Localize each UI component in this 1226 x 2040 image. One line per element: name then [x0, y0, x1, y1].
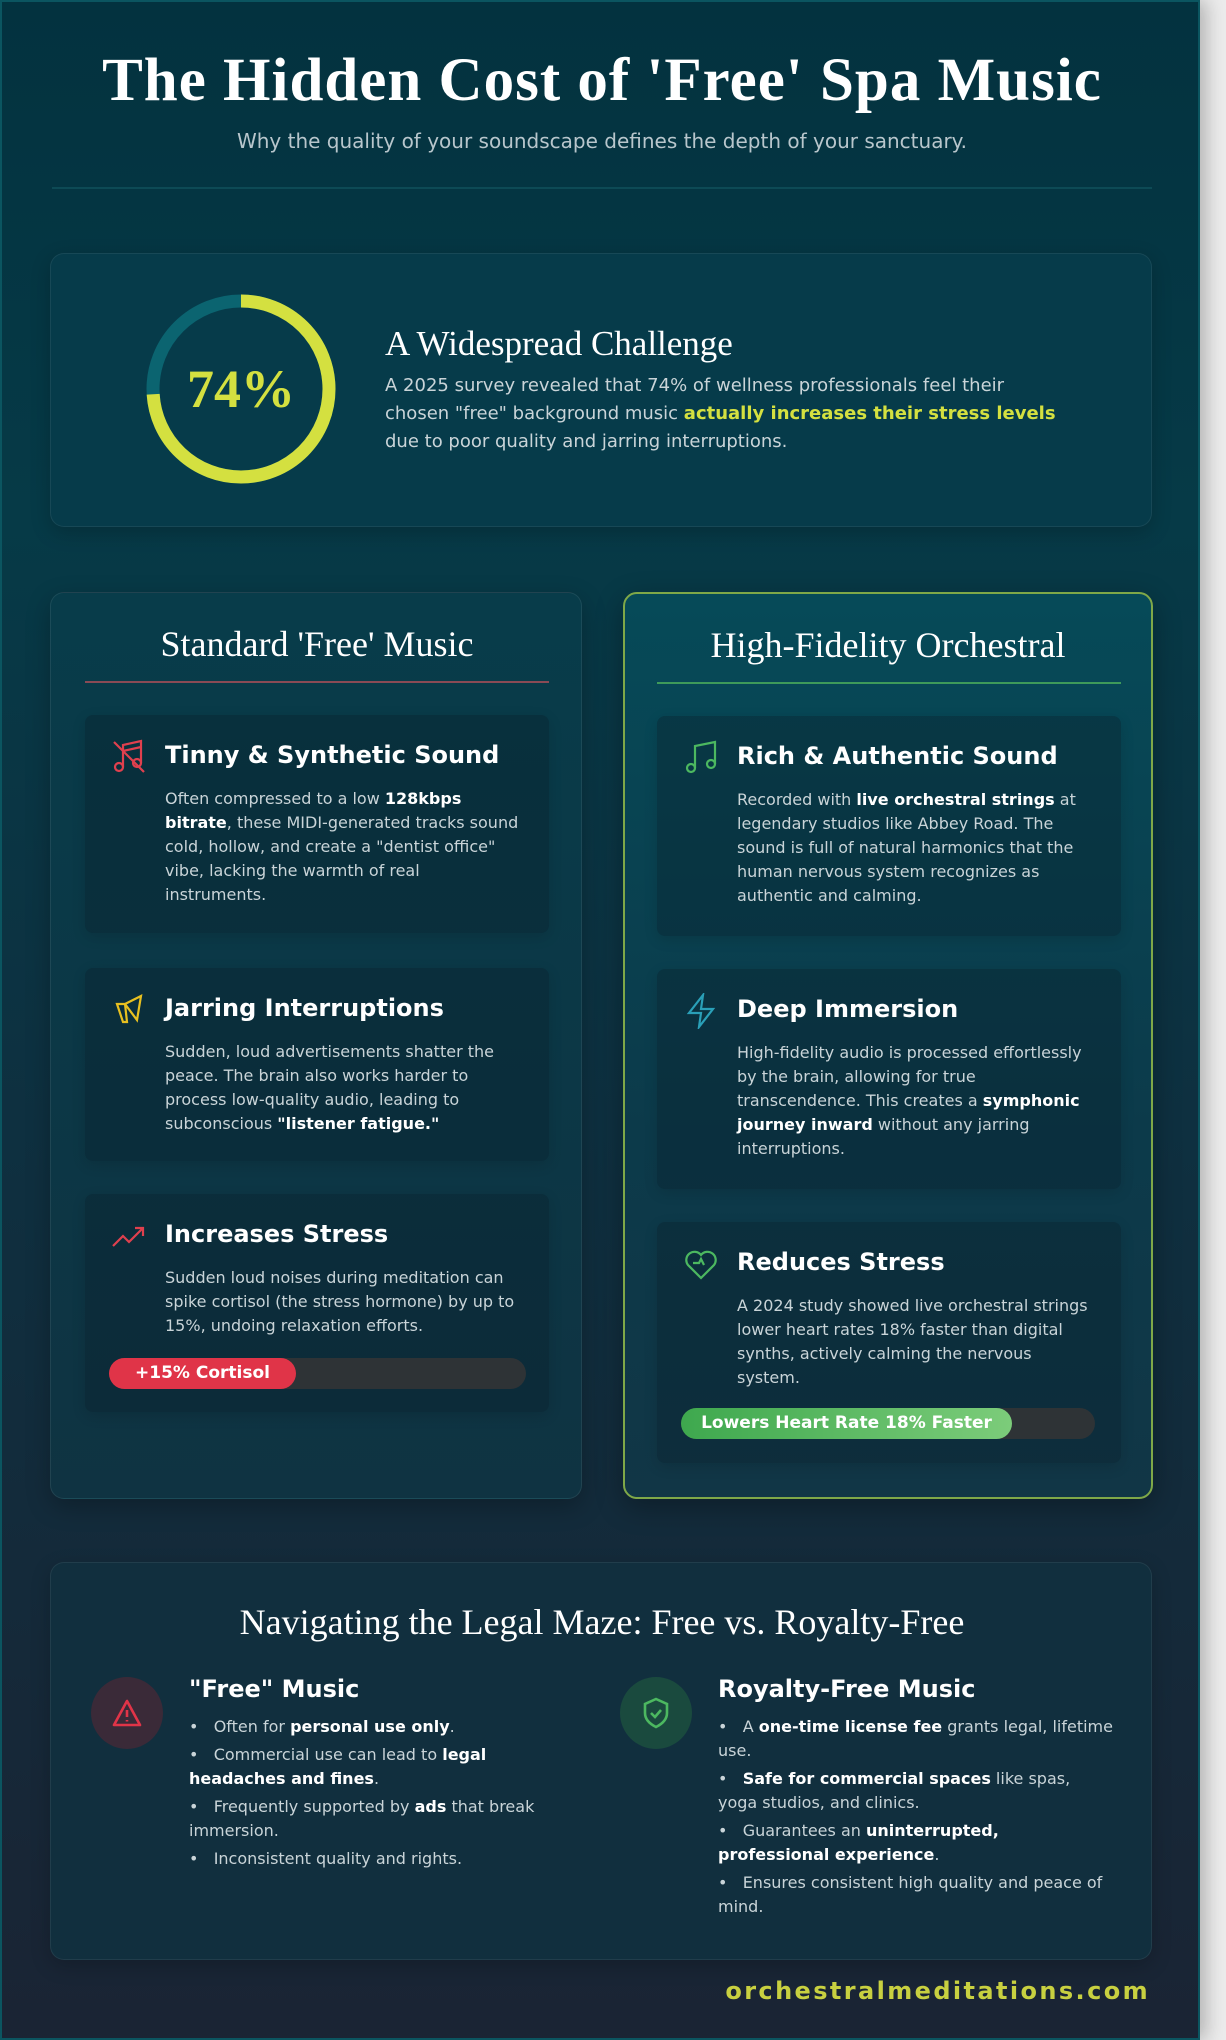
subtitle: Why the quality of your soundscape defines the depth of your sanctuary.	[237, 129, 967, 153]
column: royalty-free music: yoga studios, and clinics.	[718, 1793, 920, 1812]
icon: broken note	[113, 740, 145, 773]
heading: A Widespread Challenge	[385, 324, 733, 363]
column: free music: • Often for personal use only.	[189, 1717, 455, 1736]
bar: heart rate: Lowers Heart Rate 18% Faster	[701, 1413, 992, 1433]
card: increases stress	[85, 1194, 549, 1412]
title: The Hidden Cost of 'Free' Spa Music	[102, 47, 1102, 114]
column: royalty-free music: • Safe for commercial spaces like spas,	[718, 1769, 1070, 1788]
column: royalty-free music	[620, 1675, 1113, 1916]
icon: warning	[91, 1677, 163, 1749]
bar: heart rate	[681, 1408, 1095, 1439]
column: royalty-free music: • A one-time license fee grants legal, lifetime	[718, 1717, 1113, 1736]
icon: heart	[685, 1250, 717, 1280]
card: rich sound	[657, 716, 1121, 936]
column: royalty-free music: • Ensures consistent high quality and peace of	[718, 1873, 1102, 1892]
card: increases stress: Sudden loud noises during meditation can spike cortisol (the stress hormone) by up to 15%, undoing relaxation efforts.	[165, 1268, 514, 1335]
panel: widespread challenge	[50, 253, 1152, 527]
donut chart 74%	[146, 294, 336, 484]
icon: shield	[620, 1677, 692, 1749]
column: free music: • Commercial use can lead to legal headaches and fines.	[189, 1745, 486, 1788]
card: deep immersion: High-fidelity audio is processed effortlessly by the brain, allowing for true transcendence. This creates a symphonic journey inward without any jarring interruptions.	[737, 1043, 1082, 1158]
icon: music note	[686, 740, 716, 774]
card: tinny sound: vibe, lacking the warmth of real	[165, 861, 420, 880]
donut chart 74%: 74%	[187, 359, 295, 419]
icon: trend up	[112, 1226, 144, 1247]
card: tinny sound: Tinny & Synthetic Sound	[165, 741, 499, 769]
card: deep immersion: Deep Immersion	[737, 995, 958, 1023]
column: royalty-free music: use.	[718, 1741, 751, 1760]
column: free music	[91, 1675, 534, 1868]
column: royalty-free music: professional experience.	[718, 1845, 939, 1864]
column: free music: "Free" Music	[189, 1675, 359, 1703]
heading: High-Fidelity Orchestral	[711, 625, 1065, 665]
card: tinny sound	[85, 715, 549, 933]
column: royalty-free music: Royalty-Free Music	[718, 1675, 975, 1703]
card: tinny sound: bitrate, these MIDI-generated tracks sound cold, hollow, and create a "dentist office"	[165, 813, 518, 856]
heading: Navigating the Legal Maze: Free vs. Royalty-Free	[240, 1602, 964, 1642]
bar: cortisol: +15% Cortisol	[135, 1363, 270, 1383]
card: rich sound: Recorded with live orchestral strings at legendary studios like Abbey Road. The sound is full of natural harmonics that the human nervous system recognizes as authentic and calming.	[737, 790, 1076, 905]
card: reduces stress: Reduces Stress	[737, 1248, 945, 1276]
card: tinny sound: instruments.	[165, 885, 266, 904]
column: free music: • Frequently supported by ads that break immersion.	[189, 1797, 534, 1840]
panel: legal maze	[50, 1562, 1152, 1960]
column: royalty-free music: • Guarantees an uninterrupted,	[718, 1821, 999, 1840]
icon: megaphone	[116, 994, 142, 1024]
card: reduces stress: A 2024 study showed live orchestral strings lower heart rates 18% faster than digital synths, actively calming the nervous system.	[737, 1296, 1088, 1387]
card: jarring interruptions: Jarring Interruptions	[165, 994, 444, 1022]
bar: cortisol	[109, 1358, 526, 1389]
text block: A 2025 survey revealed that 74% of wellness professionals feel their chosen "free" background music actually increases their stress levels due to poor quality and jarring interruptions.	[385, 375, 1056, 452]
footer url: orchestralmeditations.com	[725, 1977, 1150, 2005]
heading: Standard 'Free' Music	[161, 624, 473, 664]
card: increases stress: Increases Stress	[165, 1220, 388, 1248]
panel: high-fidelity orchestral	[623, 592, 1153, 1499]
icon: bolt	[686, 993, 716, 1029]
card: reduces stress	[657, 1222, 1121, 1463]
card: tinny sound: Often compressed to a low 128kbps	[165, 789, 461, 808]
card: jarring interruptions	[85, 968, 549, 1161]
column: free music: • Inconsistent quality and rights.	[189, 1849, 462, 1868]
card: jarring interruptions: Sudden, loud advertisements shatter the peace. The brain also works harder to process low-quality audio, leading to subconscious "listener fatigue."	[165, 1042, 494, 1133]
column: royalty-free music: mind.	[718, 1897, 763, 1916]
card: deep immersion	[657, 969, 1121, 1189]
panel: standard free music	[50, 592, 582, 1499]
card: rich sound: Rich & Authentic Sound	[737, 742, 1058, 770]
